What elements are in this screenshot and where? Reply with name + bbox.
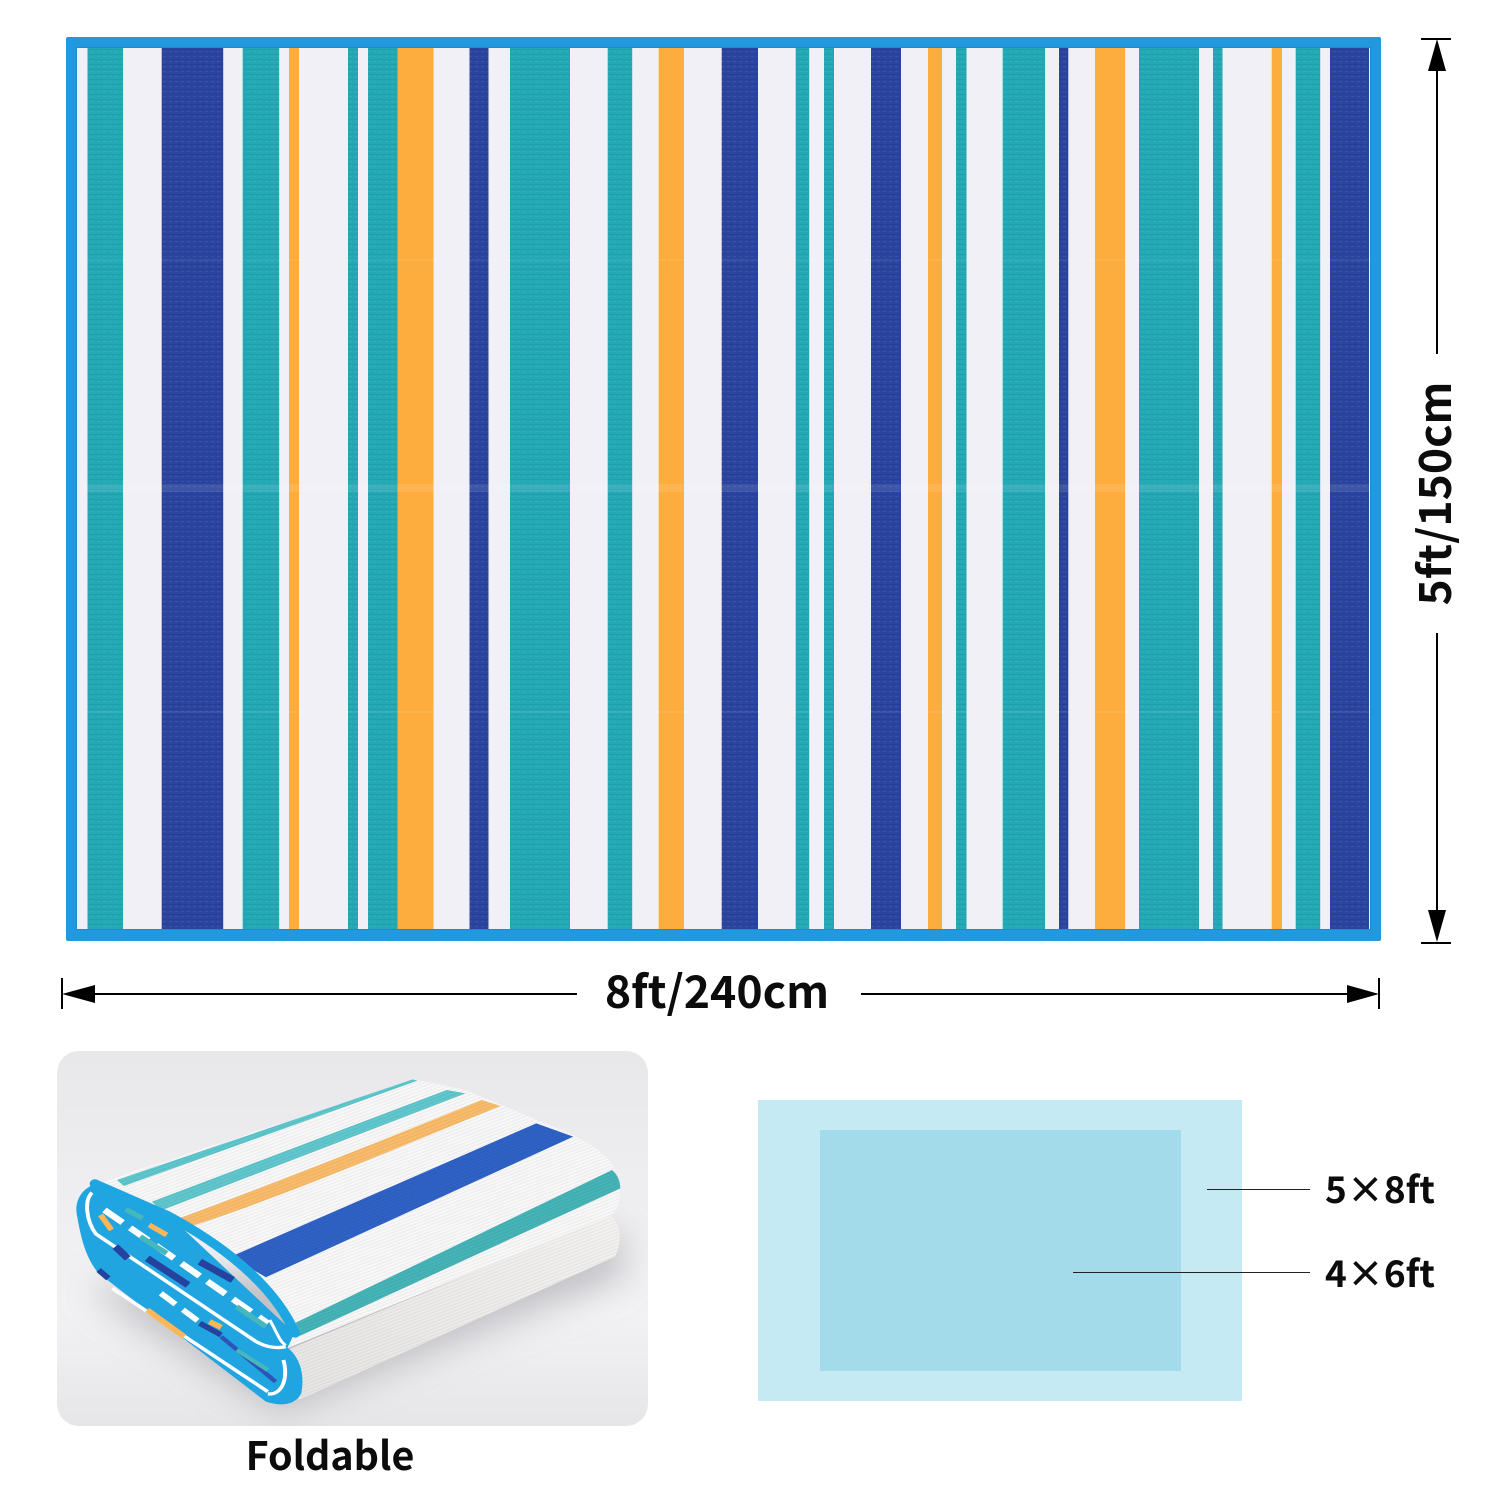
teal edge stripe xyxy=(117,1079,418,1186)
folded mat shadow xyxy=(85,1230,625,1412)
side edge binding xyxy=(76,1183,302,1404)
striped mat xyxy=(66,37,1381,941)
mat blue border xyxy=(66,37,1381,941)
lower fold layer xyxy=(283,1215,620,1400)
teal stripe xyxy=(152,1090,465,1211)
photo panel: folded mat xyxy=(57,1051,648,1426)
mat white base xyxy=(77,48,1370,929)
width label: 8ft/240cm xyxy=(605,956,829,1021)
leader line 4x6 xyxy=(1073,1272,1310,1273)
outer size rectangle xyxy=(758,1100,1242,1401)
orange stripe xyxy=(176,1100,500,1227)
inner size rectangle xyxy=(820,1130,1181,1371)
height dimension arrow xyxy=(1421,38,1451,944)
teal stripes xyxy=(88,48,1320,929)
inner folded layers xyxy=(87,1193,286,1394)
inner fold white edge xyxy=(270,1320,286,1345)
size comparison diagram xyxy=(758,1100,1435,1401)
folded mat illustration xyxy=(76,1079,620,1404)
mat binding seam xyxy=(76,48,1370,930)
label 5x8ft: 5×8ft xyxy=(1325,1160,1435,1214)
width dimension arrow xyxy=(61,978,1380,1009)
mat fold creases xyxy=(77,259,1370,713)
foldable caption: Foldable xyxy=(246,1425,414,1482)
top fold layer xyxy=(97,1079,620,1348)
blue stripe xyxy=(231,1123,573,1277)
panel background xyxy=(57,1051,648,1426)
lower teal stripe xyxy=(296,1170,620,1336)
height label: 5ft/150cm xyxy=(1399,382,1464,605)
leader line 5x8 xyxy=(1207,1189,1310,1190)
orange stripes xyxy=(289,48,1282,929)
navy stripes xyxy=(162,48,1369,929)
top fold knit texture xyxy=(97,1079,620,1348)
label 4x6ft: 4×6ft xyxy=(1325,1244,1435,1298)
top edge binding xyxy=(95,1184,295,1333)
